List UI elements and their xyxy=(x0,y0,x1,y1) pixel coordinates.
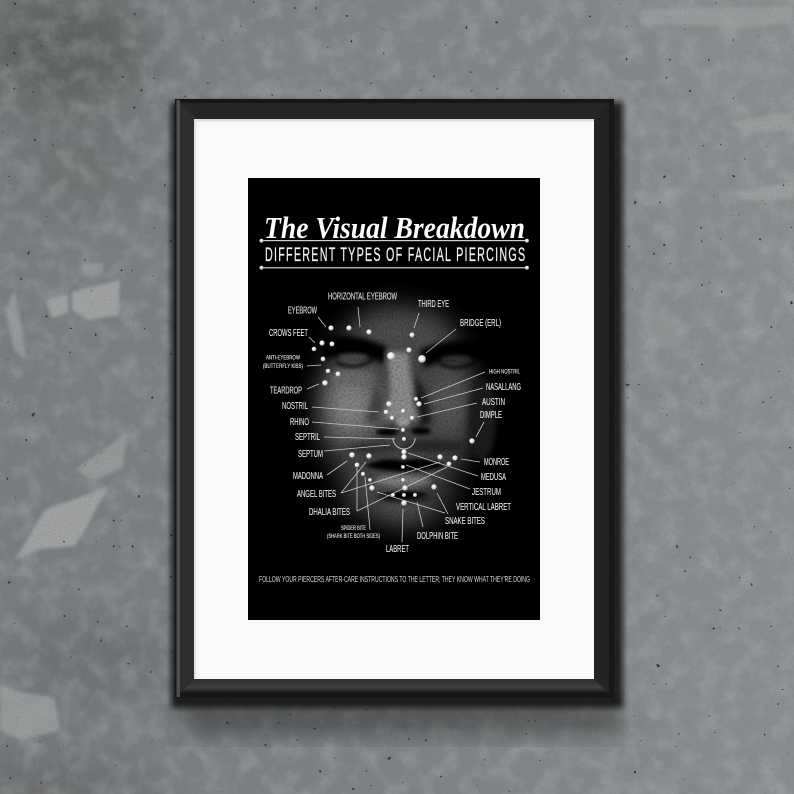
labels: SNAKE BITES xyxy=(445,515,485,527)
labels xyxy=(263,290,521,555)
labels: DHALIA BITES xyxy=(309,506,350,518)
subtitle: DIFFERENT TYPES OF FACIAL PIERCINGS xyxy=(265,245,525,266)
labels: MEDUSA xyxy=(481,471,506,483)
title: The Visual Breakdown xyxy=(264,210,525,245)
footer note: FOLLOW YOUR PIERCERS AFTER-CARE INSTRUCTIONS TO THE LETTER; THEY KNOW WHAT THEY'RE DOING xyxy=(259,575,530,584)
labels: VERTICAL LABRET xyxy=(456,501,511,513)
labels: EYEBROW xyxy=(288,304,317,316)
face portrait xyxy=(303,292,498,540)
labels: TEARDROP xyxy=(270,384,302,396)
labels: SPIDER BITE xyxy=(341,525,366,532)
labels: (BUTTERFLY KISS) xyxy=(263,363,303,370)
leader lines xyxy=(307,307,485,542)
labels: THIRD EYE xyxy=(418,298,449,310)
labels: CROWS FEET xyxy=(269,327,308,339)
labels: NASALLANG xyxy=(486,381,521,393)
subtitle rule xyxy=(260,266,529,270)
piercing studs xyxy=(312,325,475,506)
labels: LABRET xyxy=(386,543,409,555)
labels: RHINO xyxy=(290,416,309,428)
labels: SEPTRIL xyxy=(295,431,320,443)
labels: DOLPHIN BITE xyxy=(417,530,458,542)
labels: MADONNA xyxy=(293,470,323,482)
labels: HORIZONTAL EYEBROW xyxy=(328,290,397,302)
labels: NOSTRIL xyxy=(282,400,308,412)
white mat xyxy=(194,119,594,679)
septum ring xyxy=(393,438,415,449)
labels: (SHARK BITE BOTH SIDES) xyxy=(327,533,380,540)
labels: MONROE xyxy=(484,456,509,468)
labels: JESTRUM xyxy=(472,486,501,498)
labels: BRIDGE (ERL) xyxy=(460,317,501,329)
labels: HIGH NOSTRIL xyxy=(489,368,520,376)
frame cast shadows xyxy=(171,102,623,735)
poster xyxy=(248,178,540,620)
labels: AUSTIN xyxy=(482,396,505,408)
labels: DIMPLE xyxy=(480,409,502,421)
labels: ANGEL BITES xyxy=(297,488,336,500)
labels: SEPTUM xyxy=(298,448,323,460)
labels: ANTI-EYEBROW xyxy=(266,354,300,362)
picture frame xyxy=(175,99,614,698)
title rule xyxy=(260,239,529,243)
